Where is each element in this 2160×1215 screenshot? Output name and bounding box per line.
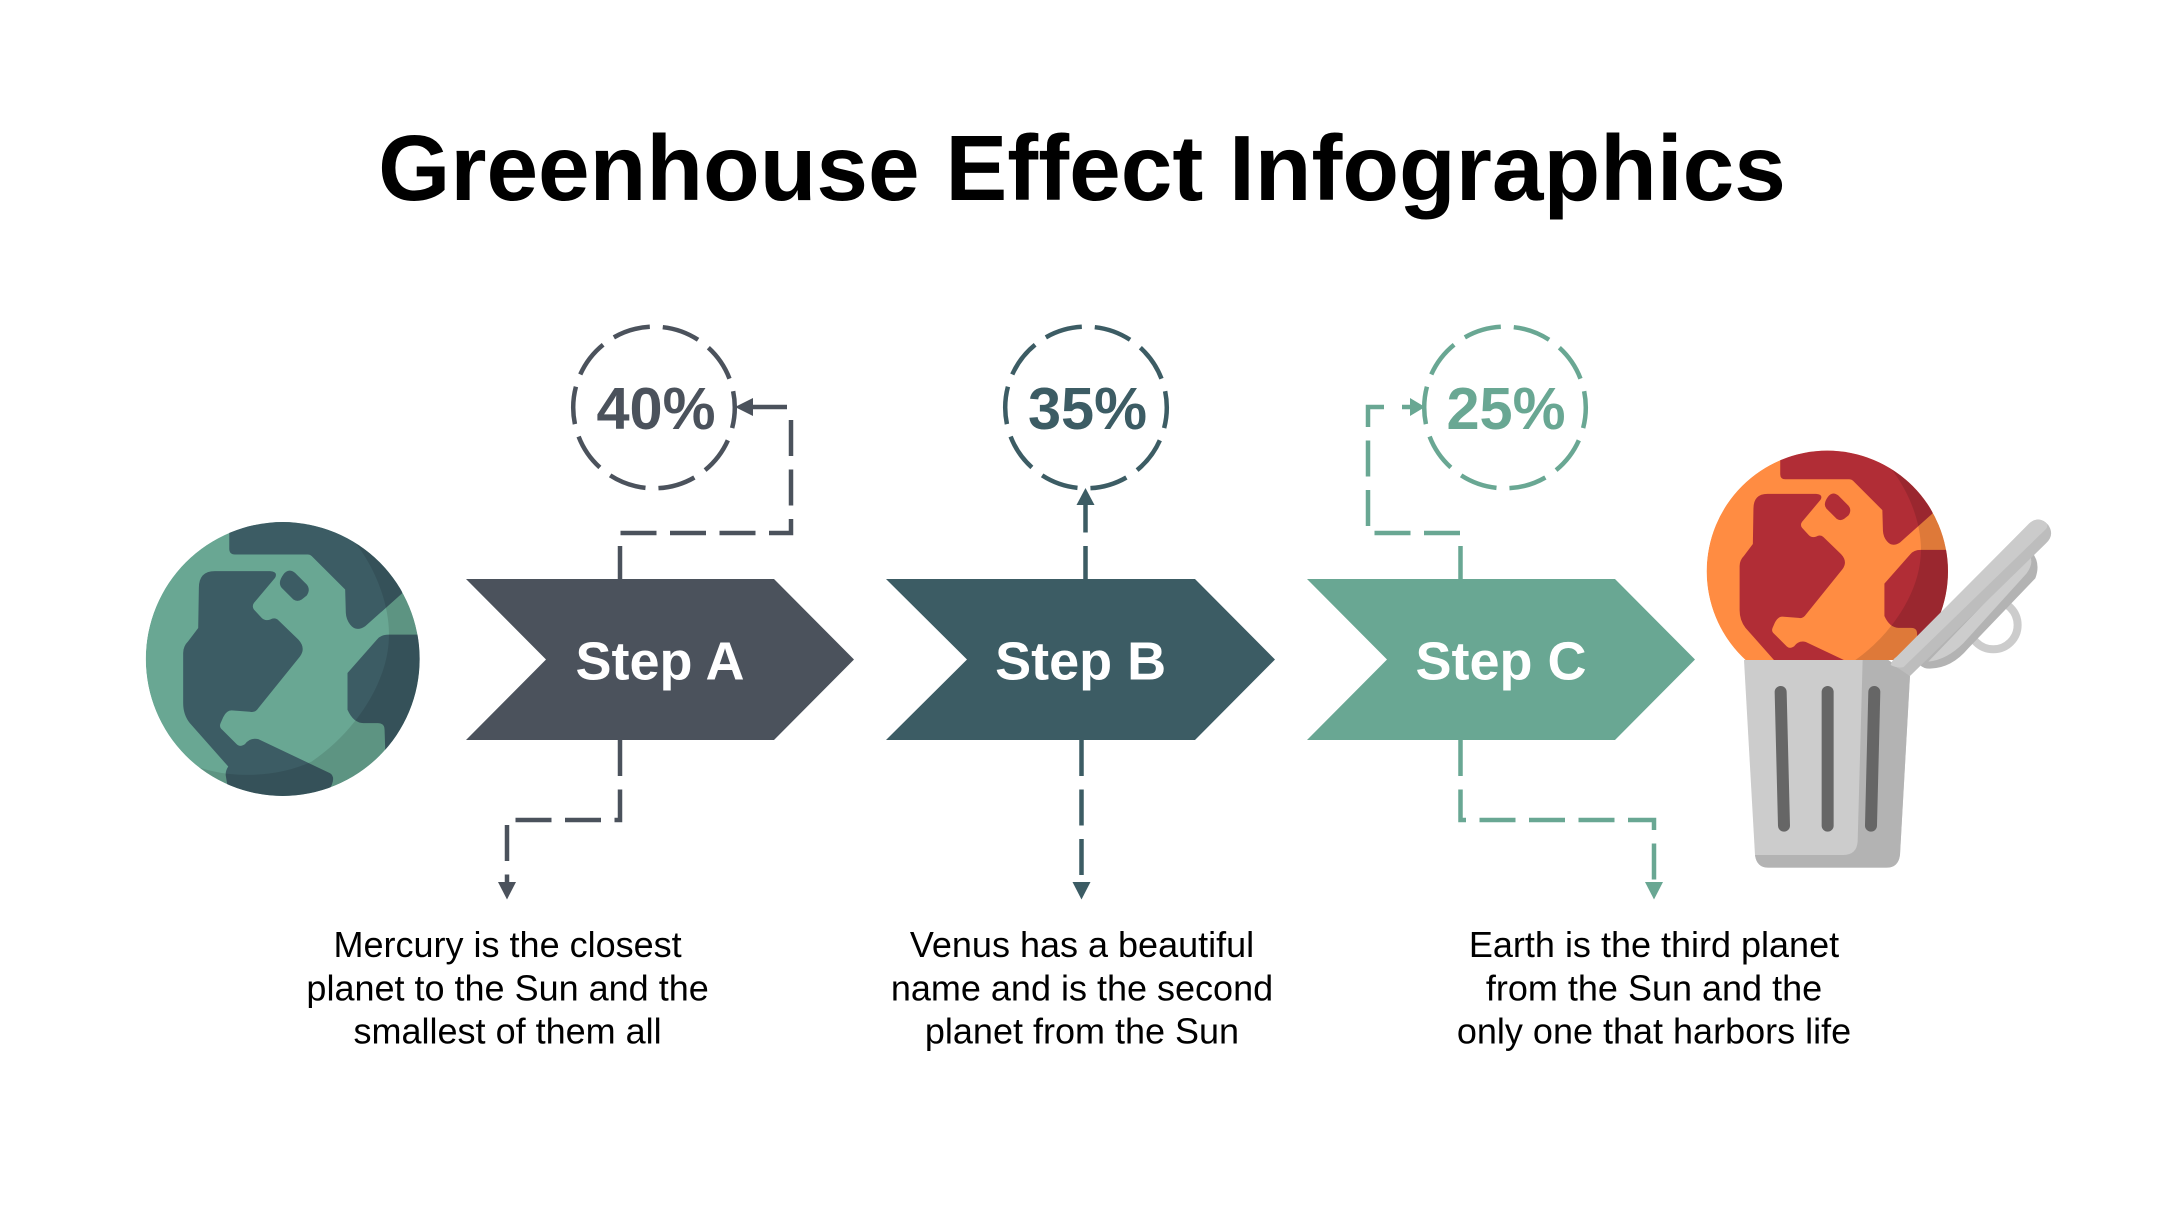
percentage circle: 35%: 35% <box>1028 375 1147 442</box>
icon: healthy green globe <box>146 522 420 796</box>
arrow: Step B to 35% <box>1076 488 1094 579</box>
text: Mercury description: Mercury is the closest <box>334 924 682 965</box>
text: Earth description: only one that harbors life <box>1457 1011 1851 1052</box>
icon part: lid bar <box>1891 520 2051 676</box>
percentage circle: 25% <box>1424 327 1586 488</box>
icon part: lid inner stripe <box>1928 556 2031 662</box>
arrow: Step C to 25% <box>1368 398 1460 579</box>
chevron: Step A: Step A <box>575 632 745 692</box>
text: Mercury description <box>306 924 709 1052</box>
text: Venus description: planet from the Sun <box>925 1011 1239 1052</box>
percentage circle: 35% <box>1005 327 1167 488</box>
text: Venus description: Venus has a beautiful <box>910 924 1254 965</box>
arrow: Step A down to text <box>498 740 620 900</box>
text: Mercury description: planet to the Sun and the <box>306 967 709 1008</box>
text: Earth description: from the Sun and the <box>1486 967 1822 1008</box>
arrow: Step C down to text <box>1460 740 1663 900</box>
chevron: Step A <box>466 579 854 740</box>
text: Earth description <box>1457 924 1851 1052</box>
icon part: bin body <box>1744 660 1910 868</box>
text: Venus description <box>891 924 1273 1052</box>
percentage circle: 25%: 25% <box>1446 375 1566 442</box>
icon part: bin shaded side <box>1755 660 1910 868</box>
percentage circle: 40% <box>573 327 735 488</box>
icon part: lid handle ring <box>1969 601 2018 649</box>
chevron: Step B <box>886 579 1275 740</box>
arrow: Step B down to text <box>1072 740 1090 900</box>
percentage circle: 40%: 40% <box>596 375 716 442</box>
chevron: Step B: Step B <box>995 632 1166 692</box>
icon part: lid underside <box>1920 550 2038 669</box>
text: Mercury description: smallest of them all <box>354 1011 662 1052</box>
icon part: bin slots <box>1781 692 1874 826</box>
icon part: red globe <box>1706 450 1948 660</box>
chevron: Step C <box>1307 579 1695 740</box>
text: Earth description: Earth is the third planet <box>1469 924 1839 965</box>
title: Greenhouse Effect Infographics <box>378 116 1786 220</box>
icon: overheated globe in trash bin <box>1707 448 2051 868</box>
arrow: Step A to 40% <box>620 398 791 579</box>
chevron: Step C: Step C <box>1415 632 1587 692</box>
text: Venus description: name and is the second <box>891 967 1273 1008</box>
